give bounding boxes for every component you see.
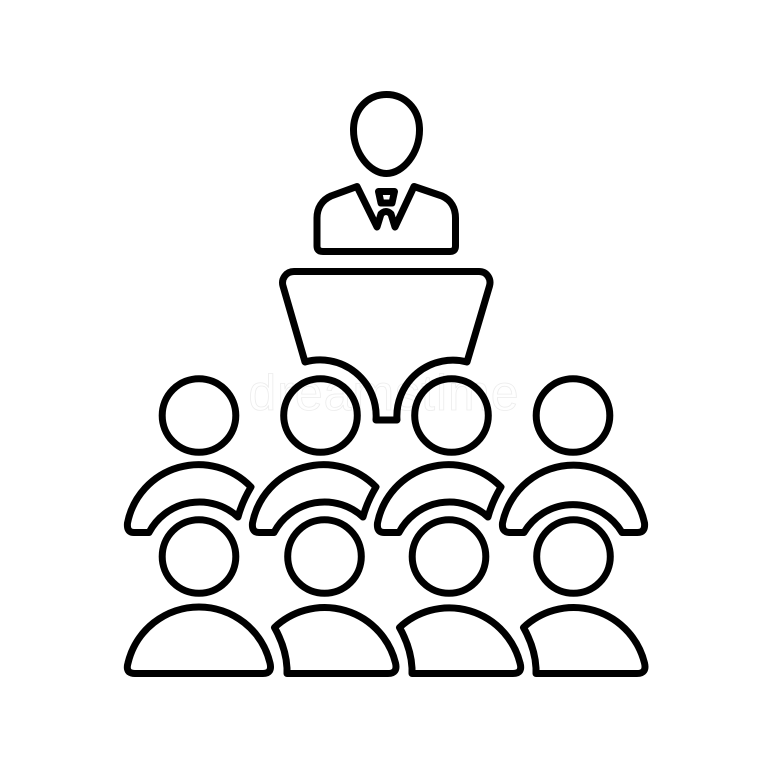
speaker bow tie knot: [378, 192, 394, 203]
audience front row: [127, 520, 645, 674]
back row person 1: [127, 379, 251, 532]
watermark: dreamstime: [248, 365, 520, 421]
back row person 4: [502, 379, 645, 532]
back row person 3: [377, 379, 501, 532]
speaker torso and collar: [317, 186, 456, 252]
speaker head: [354, 94, 420, 174]
front row person 2: [274, 520, 396, 674]
front row person 1: [127, 520, 271, 674]
back row person 2: [252, 379, 376, 532]
audience back row: [127, 379, 645, 532]
front row person 3: [400, 520, 521, 674]
front row person 4: [524, 520, 645, 674]
podium: [283, 272, 490, 420]
speaker: [317, 94, 456, 252]
